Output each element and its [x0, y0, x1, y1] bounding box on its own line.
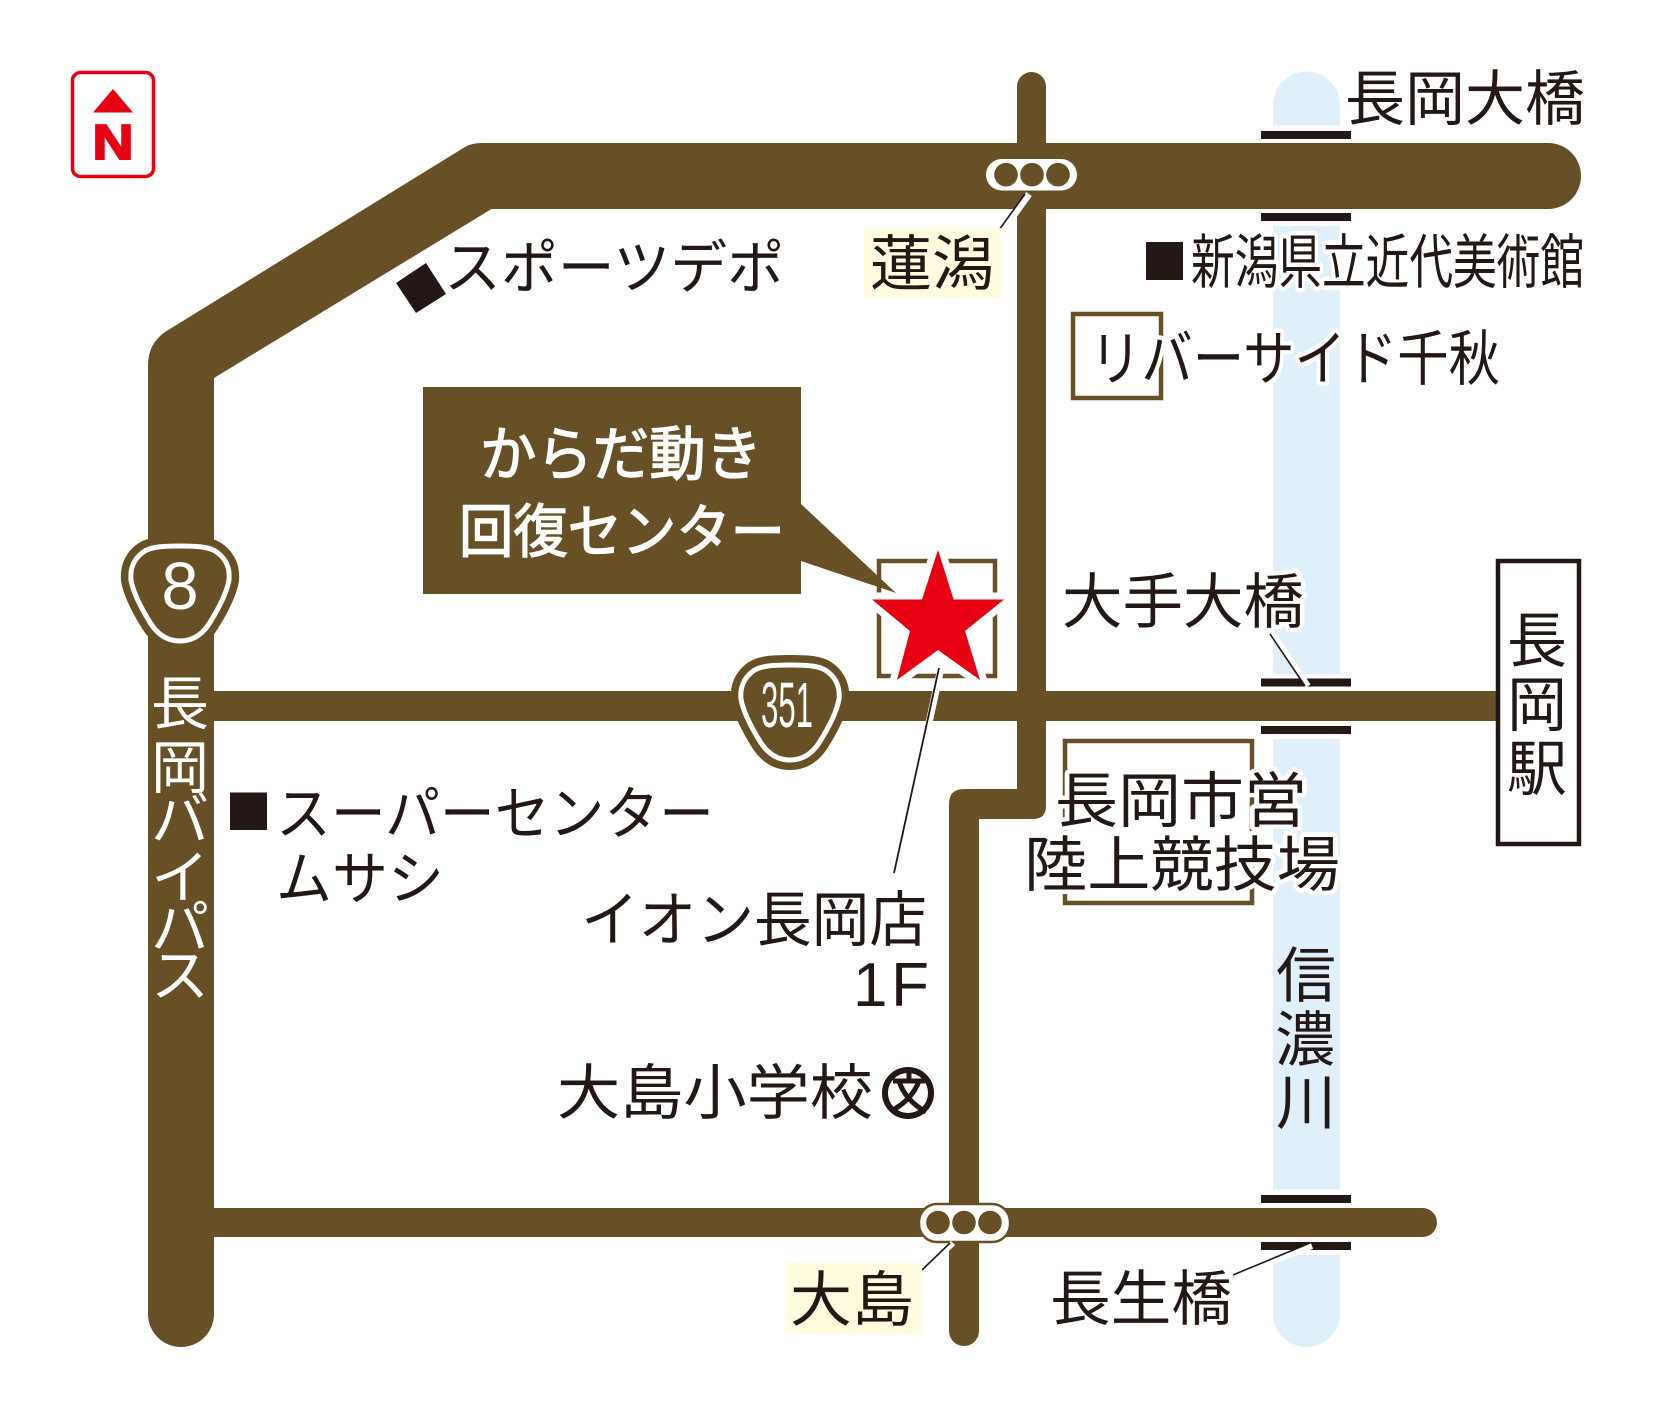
- road: route 351: [210, 691, 1498, 721]
- label: Super Center Musashi: スーパーセンター: [276, 782, 714, 847]
- road: north-south road with bend: [949, 72, 1046, 1346]
- label: Oshima elementary school: 大島小学校: [557, 1060, 873, 1127]
- building: Nagaoka municipal stadium: [1065, 741, 1252, 903]
- label: Nagaoka Ohashi bridge: 長岡大橋: [1345, 66, 1585, 133]
- label: Riverside Senshu: リバーサイド千秋: [1090, 326, 1500, 393]
- label: Nagaoka station: 駅: [1507, 736, 1567, 803]
- label: Shinano river: 信: [1276, 943, 1336, 1010]
- sign: route 351: [741, 665, 839, 760]
- label: Shinano river: [1275, 943, 1336, 1137]
- road: lower road: [210, 1208, 1437, 1237]
- road: upper main road and Nagaoka bypass: [148, 143, 1581, 1347]
- leader line: Aeon to star: [894, 668, 941, 873]
- label: Shinano river: 川: [1276, 1070, 1336, 1137]
- callout: clinic name: [423, 387, 896, 594]
- label: Ote Ohashi bridge: 大手大橋: [1062, 569, 1304, 636]
- bridge bars: [1261, 131, 1351, 1250]
- north arrow icon: [72, 72, 154, 176]
- road label: Nagaoka bypass: ス: [151, 944, 209, 1009]
- label: Nagaoka station: 長: [1507, 608, 1567, 675]
- callout: clinic name: 回復センター: [459, 500, 785, 565]
- callout: clinic name: からだ動き: [480, 422, 762, 488]
- road label: Nagaoka bypass: 長: [151, 672, 209, 737]
- leader line: Nagao bridge: [1233, 1243, 1312, 1277]
- label: Aeon Nagaoka 1F: [581, 887, 929, 1020]
- label: Nagaoka municipal stadium: [1024, 768, 1340, 899]
- label: Nagao bridge: 長生橋: [1050, 1266, 1232, 1333]
- sign: route 8: [131, 546, 229, 641]
- road label: Nagaoka bypass: バ: [151, 788, 209, 853]
- label: Hasugata: 蓮潟: [870, 231, 994, 298]
- sign: route 351: 351: [761, 669, 813, 741]
- road label: Nagaoka bypass: [151, 672, 209, 1009]
- icon: school symbol: [885, 1068, 931, 1116]
- road network: [148, 72, 1581, 1347]
- label: Aeon Nagaoka 1F: イオン長岡店: [581, 887, 927, 954]
- leader line: Oshima: [922, 1243, 953, 1270]
- label: Aeon Nagaoka 1F: 1F: [853, 951, 929, 1020]
- road label: Nagaoka bypass: パ: [151, 896, 209, 961]
- leader line: Ote Ohashi bridge: [1270, 634, 1308, 686]
- building: Aeon Nagaoka: [879, 561, 995, 676]
- leader line: Hasugata: [999, 194, 1029, 230]
- label: Super Center Musashi: [230, 782, 714, 912]
- icon: red star location: [872, 550, 1004, 680]
- label: Shinano river: 濃: [1275, 1007, 1335, 1074]
- road label: Nagaoka bypass: イ: [151, 846, 209, 911]
- traffic signal: Hasugata: [986, 159, 1077, 190]
- label: Nagaoka municipal stadium: 長岡市営: [1055, 768, 1307, 835]
- building: Riverside Senshu: [1073, 314, 1161, 398]
- traffic signal: Oshima: [919, 1204, 1010, 1242]
- sign: route 8: 8: [161, 549, 199, 624]
- river: Shinano: [1261, 72, 1351, 1347]
- label: Super Center Musashi: ムサシ: [276, 847, 444, 912]
- label: Sports Depot: スポーツデポ: [444, 236, 784, 301]
- label: Oshima: 大島: [790, 1267, 914, 1334]
- north arrow icon: N: [92, 116, 134, 170]
- label: Nagaoka station: 岡: [1507, 672, 1567, 739]
- label: Nagaoka municipal stadium: 陸上競技場: [1024, 832, 1340, 899]
- label: Nagaoka station: [1498, 561, 1579, 844]
- road label: Nagaoka bypass: 岡: [151, 736, 209, 801]
